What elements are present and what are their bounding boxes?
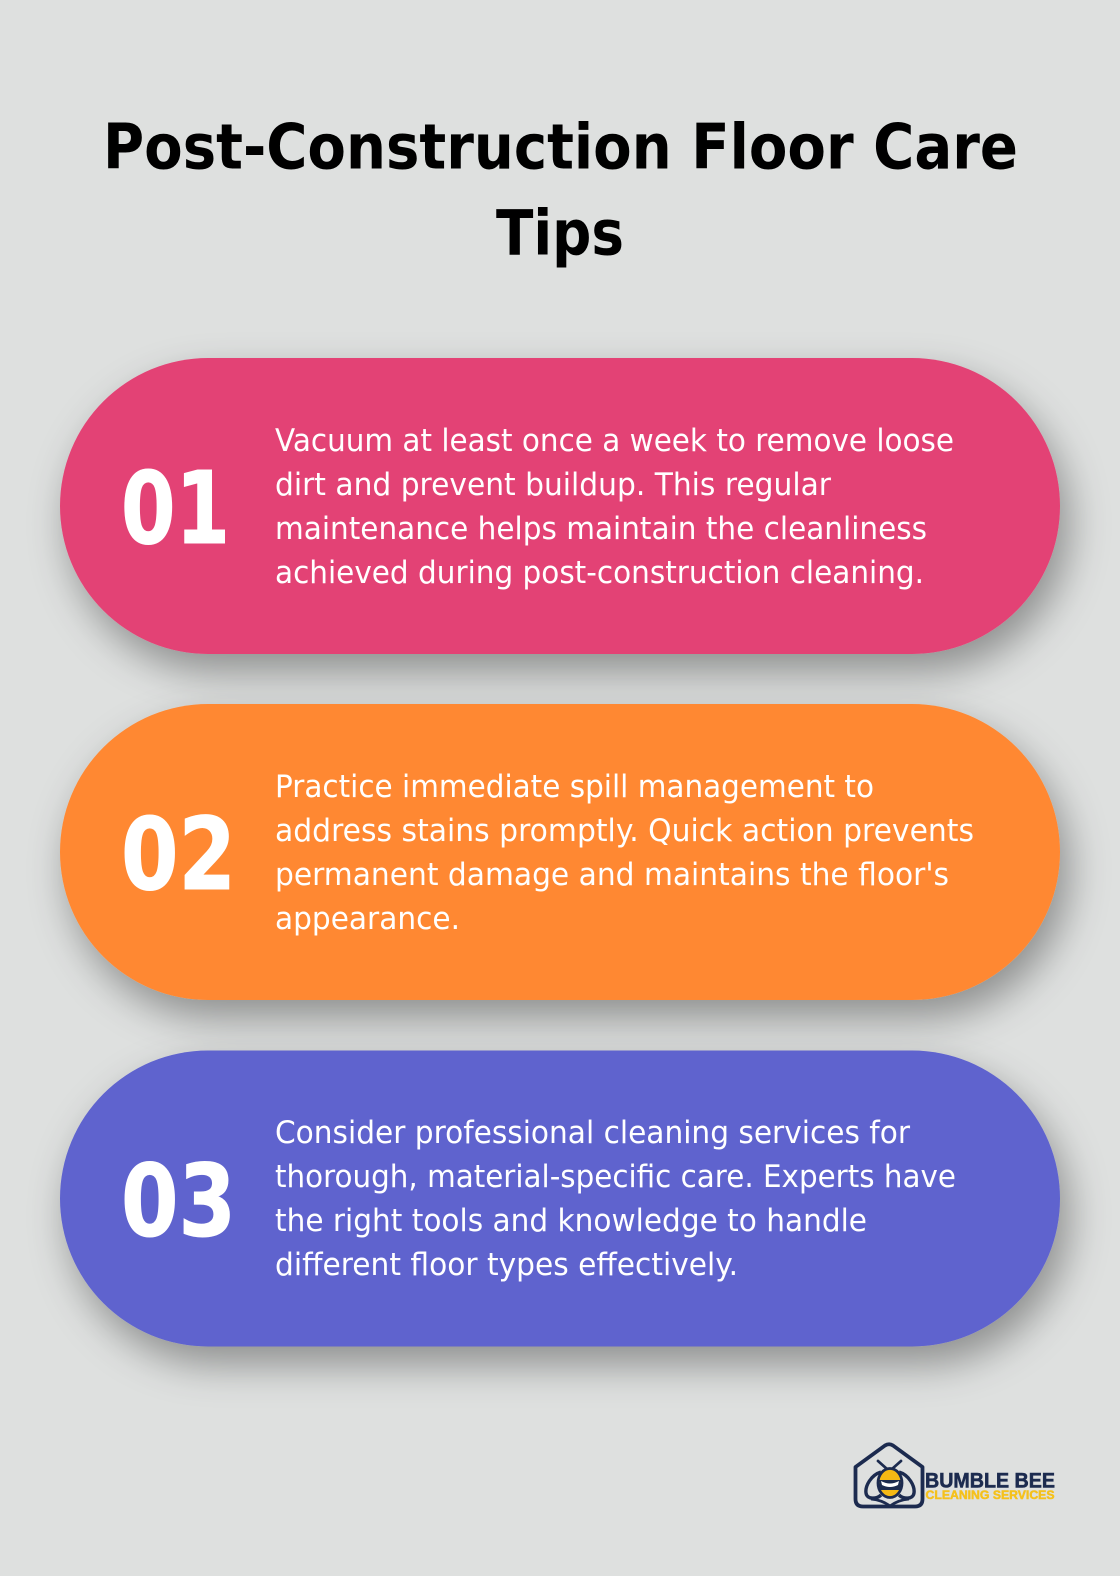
- number 01: 01: [121, 450, 230, 567]
- title: [103, 110, 1018, 270]
- number 03: 03: [121, 1142, 236, 1260]
- text block: tip 02: appearance.: [275, 901, 460, 937]
- text block: tip 01: achieved during post-construction cleaning.: [275, 555, 924, 591]
- number 02: 02: [121, 796, 236, 913]
- pill background: pink: [60, 358, 1060, 654]
- text block: tip 03: the right tools and knowledge to handle: [275, 1203, 867, 1239]
- wordmark: BUMBLE BEE: [925, 1468, 1055, 1492]
- title: Post-Construction Floor Care: [103, 110, 1018, 184]
- text block: tip 03: different floor types effectively.: [275, 1247, 738, 1283]
- text block: tip 02: Practice immediate spill management to: [275, 769, 874, 805]
- pill background: blue: [60, 1050, 1060, 1346]
- text block: tip 03: thorough, material-specific care. Experts have: [275, 1159, 956, 1195]
- panel: tip 02: [60, 704, 1060, 1000]
- logo: Bumble Bee Cleaning Services: [856, 1444, 1055, 1506]
- text block: tip 01: [275, 423, 954, 591]
- panel: tip 01: [60, 358, 1060, 654]
- title: Tips: [496, 196, 624, 270]
- text block: tip 01: maintenance helps maintain the cleanliness: [275, 511, 927, 547]
- text block: tip 03: Consider professional cleaning services for: [275, 1115, 910, 1151]
- text block: tip 03: [275, 1115, 956, 1283]
- text block: tip 01: dirt and prevent buildup. This regular: [275, 467, 831, 503]
- text block: tip 01: Vacuum at least once a week to remove loose: [275, 423, 954, 459]
- pill background: orange: [60, 704, 1060, 1000]
- wordmark: CLEANING SERVICES: [926, 1488, 1054, 1502]
- text block: tip 02: [275, 769, 974, 937]
- icon: house with bee: [856, 1444, 922, 1506]
- text block: tip 02: address stains promptly. Quick action prevents: [275, 813, 974, 849]
- wordmark: [925, 1468, 1055, 1502]
- text block: tip 02: permanent damage and maintains the floor's: [275, 857, 949, 893]
- panel: tip 03: [60, 1050, 1060, 1346]
